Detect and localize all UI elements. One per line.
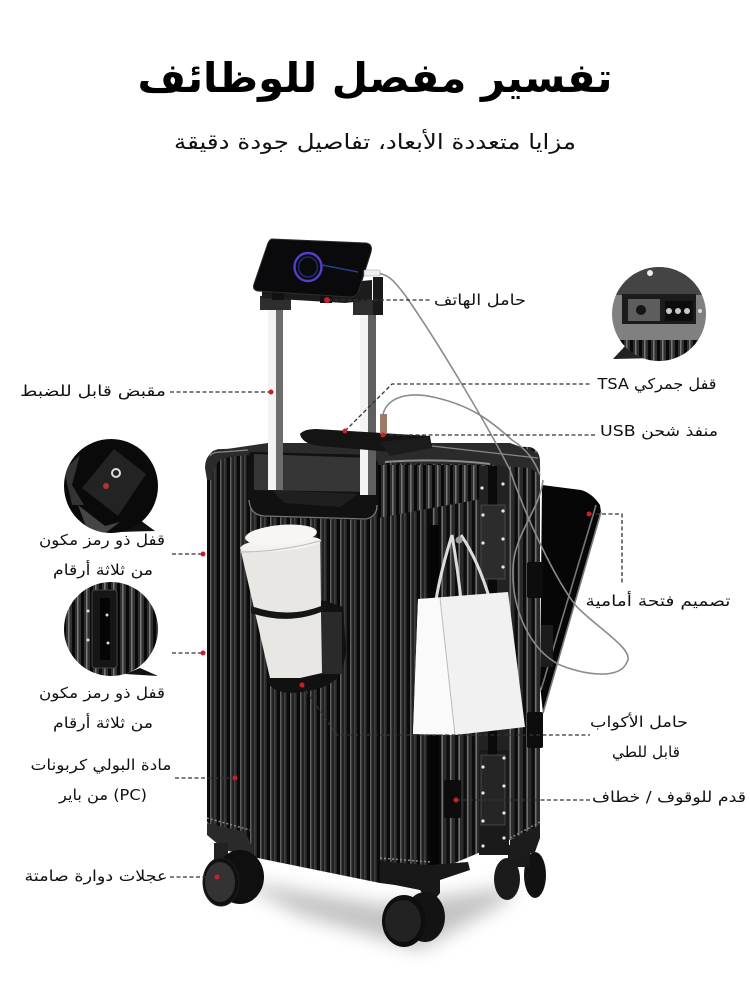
swivel wheel left <box>203 843 264 906</box>
label: lock 1: قفل ذو رمز مكون <box>39 531 165 549</box>
pointer: phone holder <box>324 297 430 303</box>
callout bubble: three digit lock <box>64 439 158 533</box>
label: cup holder: حامل الأكواب <box>590 712 688 731</box>
label: cup holder: قابل للطي <box>612 743 680 762</box>
label: PC material: من باير (PC) <box>58 786 147 804</box>
wheels back right <box>494 845 546 900</box>
aluminium frame column <box>479 466 509 855</box>
top carry handle <box>300 429 432 452</box>
label: silent wheels: عجلات دوارة صامتة <box>24 867 168 885</box>
callout bubble: hinge lock <box>64 582 158 676</box>
pointer: silent wheels <box>170 874 220 880</box>
label: adjustable handle: مقبض قابل للضبط <box>20 382 166 400</box>
USB side grip <box>380 437 432 456</box>
callout bubble: TSA lock <box>612 267 706 361</box>
suitcase body front <box>430 445 540 884</box>
open front panel <box>540 485 601 713</box>
title: تفسير مفصل للوظائف <box>138 54 612 102</box>
floor shadow <box>235 880 520 950</box>
suitcase <box>203 305 546 947</box>
pointer: front opening <box>586 512 622 584</box>
pointer: cup holder <box>300 682 590 735</box>
label: USB port: USB منفذ شحن <box>600 422 718 440</box>
label: phone holder: حامل الهاتف <box>434 291 526 309</box>
shopping bag <box>413 535 525 735</box>
pointer: USB port <box>380 432 595 438</box>
label: lock 1 <box>39 531 165 579</box>
side clasps <box>527 562 543 748</box>
label: lock 2: قفل ذو رمز مكون <box>39 684 165 702</box>
label: lock 2: من ثلاثة أرقام <box>53 713 153 732</box>
label: TSA lock: TSA قفل جمركي <box>596 375 716 394</box>
pointer: adjustable handle <box>170 390 274 394</box>
label: lock 1: من ثلاثة أرقام <box>53 560 153 579</box>
label: front opening: تصميم فتحة أمامية <box>586 591 730 610</box>
pointer: lock 2 <box>172 650 206 656</box>
power cables <box>372 272 628 674</box>
swivel wheel middle <box>382 892 445 947</box>
telescopic handle <box>268 305 376 495</box>
phone charging ring <box>294 253 358 281</box>
phone <box>254 239 371 297</box>
pointer: TSA lock <box>342 384 592 434</box>
label: lock 2 <box>39 684 165 732</box>
handle recess <box>248 452 378 520</box>
pointer: lock 1 <box>172 552 206 556</box>
corner column <box>430 525 439 870</box>
label: cup holder <box>590 712 688 762</box>
subtitle: مزايا متعددة الأبعاد، تفاصيل جودة دقيقة <box>174 129 576 154</box>
label: kickstand: قدم للوقوف / خطاف <box>592 788 746 806</box>
pointer: PC material <box>175 776 238 780</box>
USB plug <box>380 414 387 434</box>
label: PC material: مادة البولي كربونات <box>30 756 172 775</box>
suitcase body side <box>207 445 430 884</box>
corner caps <box>207 818 540 905</box>
label: PC material <box>30 756 172 804</box>
pointer: kickstand <box>454 798 590 802</box>
top frame <box>205 443 540 518</box>
kickstand hook <box>444 780 461 818</box>
phone cable plug <box>364 270 380 276</box>
coffee cup <box>240 522 326 678</box>
cup holder <box>266 600 346 693</box>
phone holder <box>260 277 383 315</box>
